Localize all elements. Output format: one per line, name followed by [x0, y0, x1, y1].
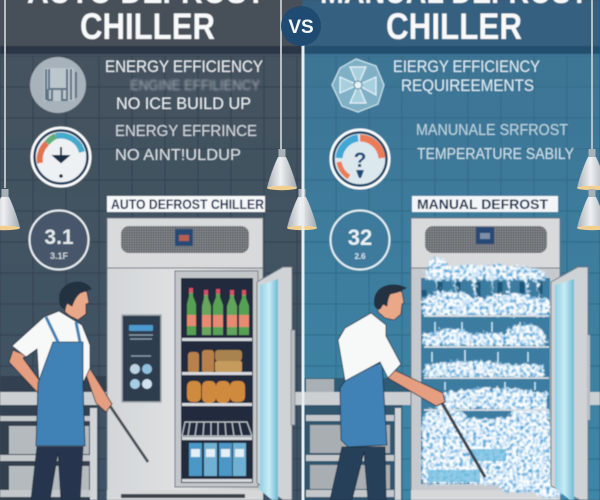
divider — [302, 45, 304, 500]
wire shelves — [424, 316, 549, 410]
hair — [59, 282, 91, 309]
badge: vs — [281, 6, 321, 46]
shelf: baked goods — [187, 381, 245, 403]
top vent unit — [411, 218, 560, 268]
control display — [122, 315, 161, 402]
open fridge interior — [175, 271, 258, 487]
left arm — [9, 350, 54, 400]
icon: temperature readout: 32 — [348, 225, 372, 250]
shelf shadows — [424, 282, 540, 298]
icon: temperature question gauge: ? — [354, 149, 366, 172]
text: energy and temperature drawbacks: EIERGY EFFICIENCY — [393, 57, 540, 76]
icon: building badge — [30, 57, 86, 113]
figure: technician scraping ice — [330, 285, 445, 500]
title: auto defrost chiller: CHILLER — [80, 6, 215, 47]
text: energy and temperature drawbacks: REQUIREEMENTS — [401, 76, 534, 95]
text: energy efficiency benefits: NO ICE BUILD UP — [116, 94, 251, 113]
panel: manual defrost chiller — [302, 0, 600, 500]
text: energy efficiency benefits: ENERGY EFFICIENCY — [105, 57, 263, 76]
fridge body — [411, 268, 560, 500]
manual defrost chiller unit — [411, 218, 590, 500]
fridge body — [107, 268, 263, 500]
panel: auto defrost chiller — [0, 0, 302, 500]
header band — [302, 0, 600, 54]
text: energy efficiency benefits: ENGINE EFFILIENCY — [130, 77, 260, 94]
icon: temperature readout — [30, 210, 88, 270]
title: auto defrost chiller — [27, 0, 265, 47]
hair — [374, 285, 406, 309]
trousers — [330, 447, 386, 500]
icon: frosted fan — [332, 59, 384, 112]
shelf: wrapped food — [188, 350, 242, 373]
text: energy efficiency benefits: NO AINT!ULDUP — [115, 147, 241, 164]
top vent unit — [107, 218, 263, 268]
icon: energy gauge — [32, 128, 90, 186]
handle / tong — [108, 403, 148, 462]
kitchen counter and cabinet — [302, 378, 600, 500]
trousers — [31, 447, 83, 500]
scraper tool — [442, 403, 485, 477]
icon: temperature readout: 3.1 — [44, 226, 74, 249]
ice shelves — [422, 257, 562, 498]
empty wire rack — [182, 422, 252, 436]
figure: technician with auto defrost chiller — [9, 282, 112, 500]
frozen interior — [421, 257, 562, 498]
shelf: green bottles — [187, 288, 249, 335]
title: manual defrost chiller — [320, 0, 588, 47]
header band — [0, 0, 302, 54]
pendant lamps — [0, 0, 600, 230]
text: energy and temperature drawbacks: MANUNALE SRFROST — [416, 122, 568, 139]
apron straps — [46, 317, 80, 342]
apron — [36, 342, 85, 446]
text: energy efficiency benefits — [105, 57, 263, 164]
icon: temperature question gauge — [331, 130, 389, 188]
right arm — [388, 369, 445, 406]
face — [378, 288, 404, 320]
title: manual defrost chiller: CHILLER — [386, 6, 522, 47]
text: energy and temperature drawbacks — [393, 57, 574, 163]
right arm — [83, 366, 112, 412]
icon: temperature readout — [330, 210, 390, 270]
open glass door — [257, 267, 295, 500]
label: auto defrost chiller: AUTO DEFROST CHILLER — [111, 196, 264, 212]
shirt — [338, 313, 401, 381]
label: manual defrost: MANUAL DEFROST — [417, 196, 548, 212]
face — [65, 287, 89, 320]
auto defrost chiller unit — [107, 218, 295, 500]
text: energy efficiency benefits: ENERGY EFFRINCE — [115, 123, 257, 140]
kitchen counter and cabinet — [0, 376, 302, 500]
badge: vs: VS — [288, 17, 314, 38]
open glass door — [551, 267, 590, 500]
text: energy and temperature drawbacks: TEMPERATURE SABILY — [417, 146, 574, 163]
apron — [340, 362, 387, 447]
shelf: milk cartons — [189, 443, 246, 476]
trapped frozen shelf — [428, 449, 506, 482]
shirt — [12, 311, 90, 383]
icon: temperature readout: 3.1F — [50, 251, 69, 261]
icon: temperature readout: 2.6 — [354, 252, 366, 261]
